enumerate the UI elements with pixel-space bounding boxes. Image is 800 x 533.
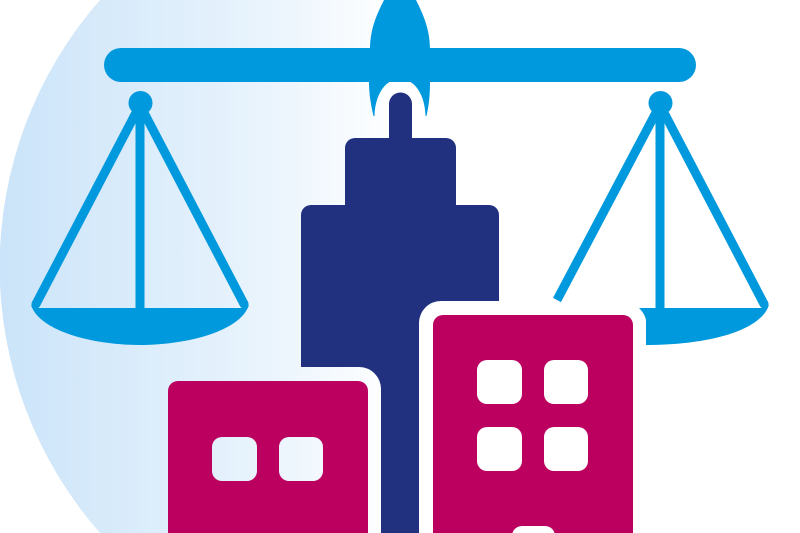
scale beam with central finial (104, 0, 696, 116)
right magenta building with windows (433, 315, 633, 533)
background circle (0, 0, 400, 533)
right scale pan, partly hidden by building (557, 91, 769, 345)
left scale pan (31, 91, 249, 345)
left magenta building with two windows (168, 381, 368, 533)
central navy tower (301, 92, 499, 533)
